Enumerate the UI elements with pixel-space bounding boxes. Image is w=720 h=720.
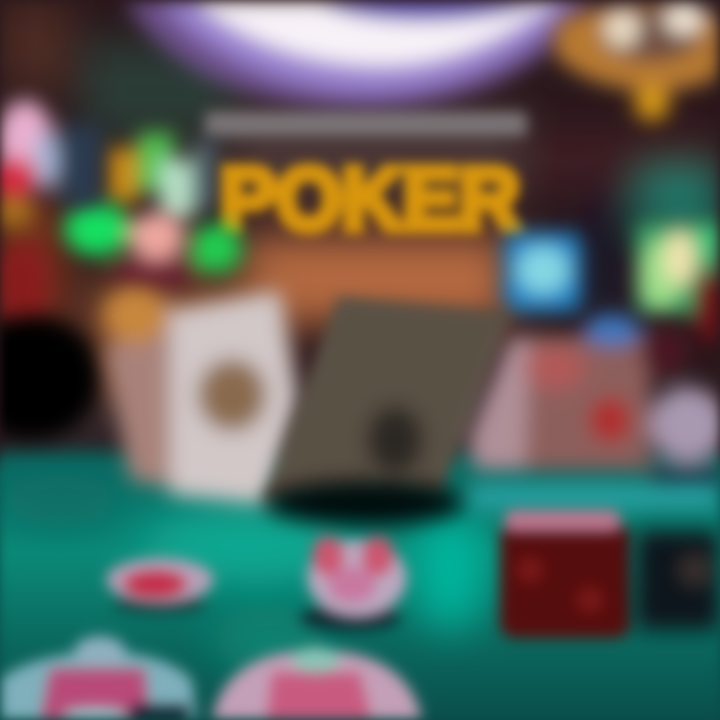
poker chip small left	[106, 558, 214, 613]
felt table	[0, 440, 720, 720]
blue screen	[504, 232, 582, 312]
chandelier	[555, 1, 720, 121]
poker chip center	[300, 536, 407, 631]
ceiling light ring	[125, 0, 595, 110]
teal table edge	[470, 484, 720, 510]
green and pink lights	[64, 202, 242, 285]
green screen	[636, 220, 720, 343]
dark arch	[0, 316, 100, 440]
dark die	[636, 530, 720, 630]
illegible tagline band	[205, 112, 527, 136]
left logo shield	[106, 132, 216, 220]
poker chip bottom left	[0, 636, 197, 720]
poker title: POKER	[220, 149, 520, 248]
red die	[500, 510, 630, 638]
center dark card	[262, 296, 512, 500]
left playing cards	[103, 287, 298, 505]
left striped decoration	[0, 100, 102, 331]
card shadow	[265, 408, 465, 525]
right playing cards	[468, 314, 720, 495]
poker chip bottom center	[212, 647, 422, 720]
